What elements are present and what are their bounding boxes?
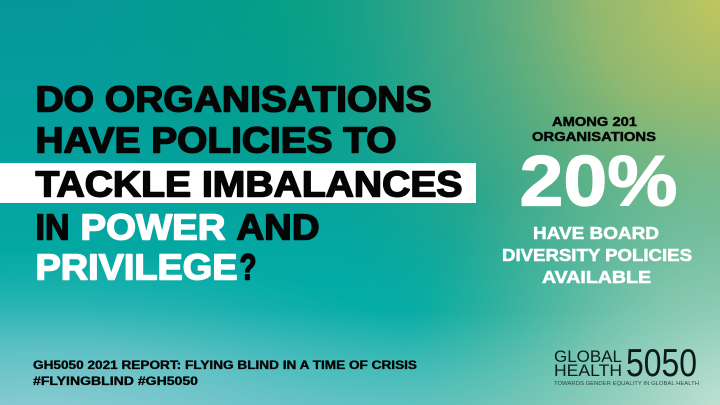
logo wordmark [554,348,622,380]
logo wordmark: GLOBAL [554,348,622,366]
heading line 3 on highlight: TACKLE IMBALANCES [36,164,462,204]
logo 5050: 5050 [626,342,697,385]
statistic panel [502,114,692,287]
stat description [502,223,692,287]
footer report text [33,360,417,388]
stat description: HAVE BOARD [533,223,659,243]
heading word: AND: AND [236,206,320,248]
logo tagline: TOWARDS GENDER EQUALITY IN GLOBAL HEALTH [554,381,699,387]
heading word: POWER: POWER [80,206,226,248]
stat description: AVAILABLE [542,267,651,287]
heading line 2: HAVE POLICIES TO [36,120,396,160]
stat intro text [532,114,656,144]
heading word: PRIVILEGE: PRIVILEGE [36,246,238,288]
stat intro text: ORGANISATIONS [532,129,656,144]
heading line 1: DO ORGANISATIONS [36,78,432,120]
stat intro text: AMONG 201 [552,114,637,129]
heading: main question [0,78,476,288]
footer report text: GH5050 2021 REPORT: FLYING BLIND IN A TIME OF CRISIS [33,360,417,372]
white highlight band [0,163,476,203]
footer report text: #FLYINGBLIND #GH5050 [33,376,198,388]
logo: Global Health 5050 [554,342,699,387]
logo wordmark: HEALTH [554,362,622,380]
heading word: IN: IN [36,206,70,248]
stat number: 20%: 20% [520,142,678,222]
stat description: DIVERSITY POLICIES [502,245,692,265]
heading question mark: ? [240,246,256,288]
